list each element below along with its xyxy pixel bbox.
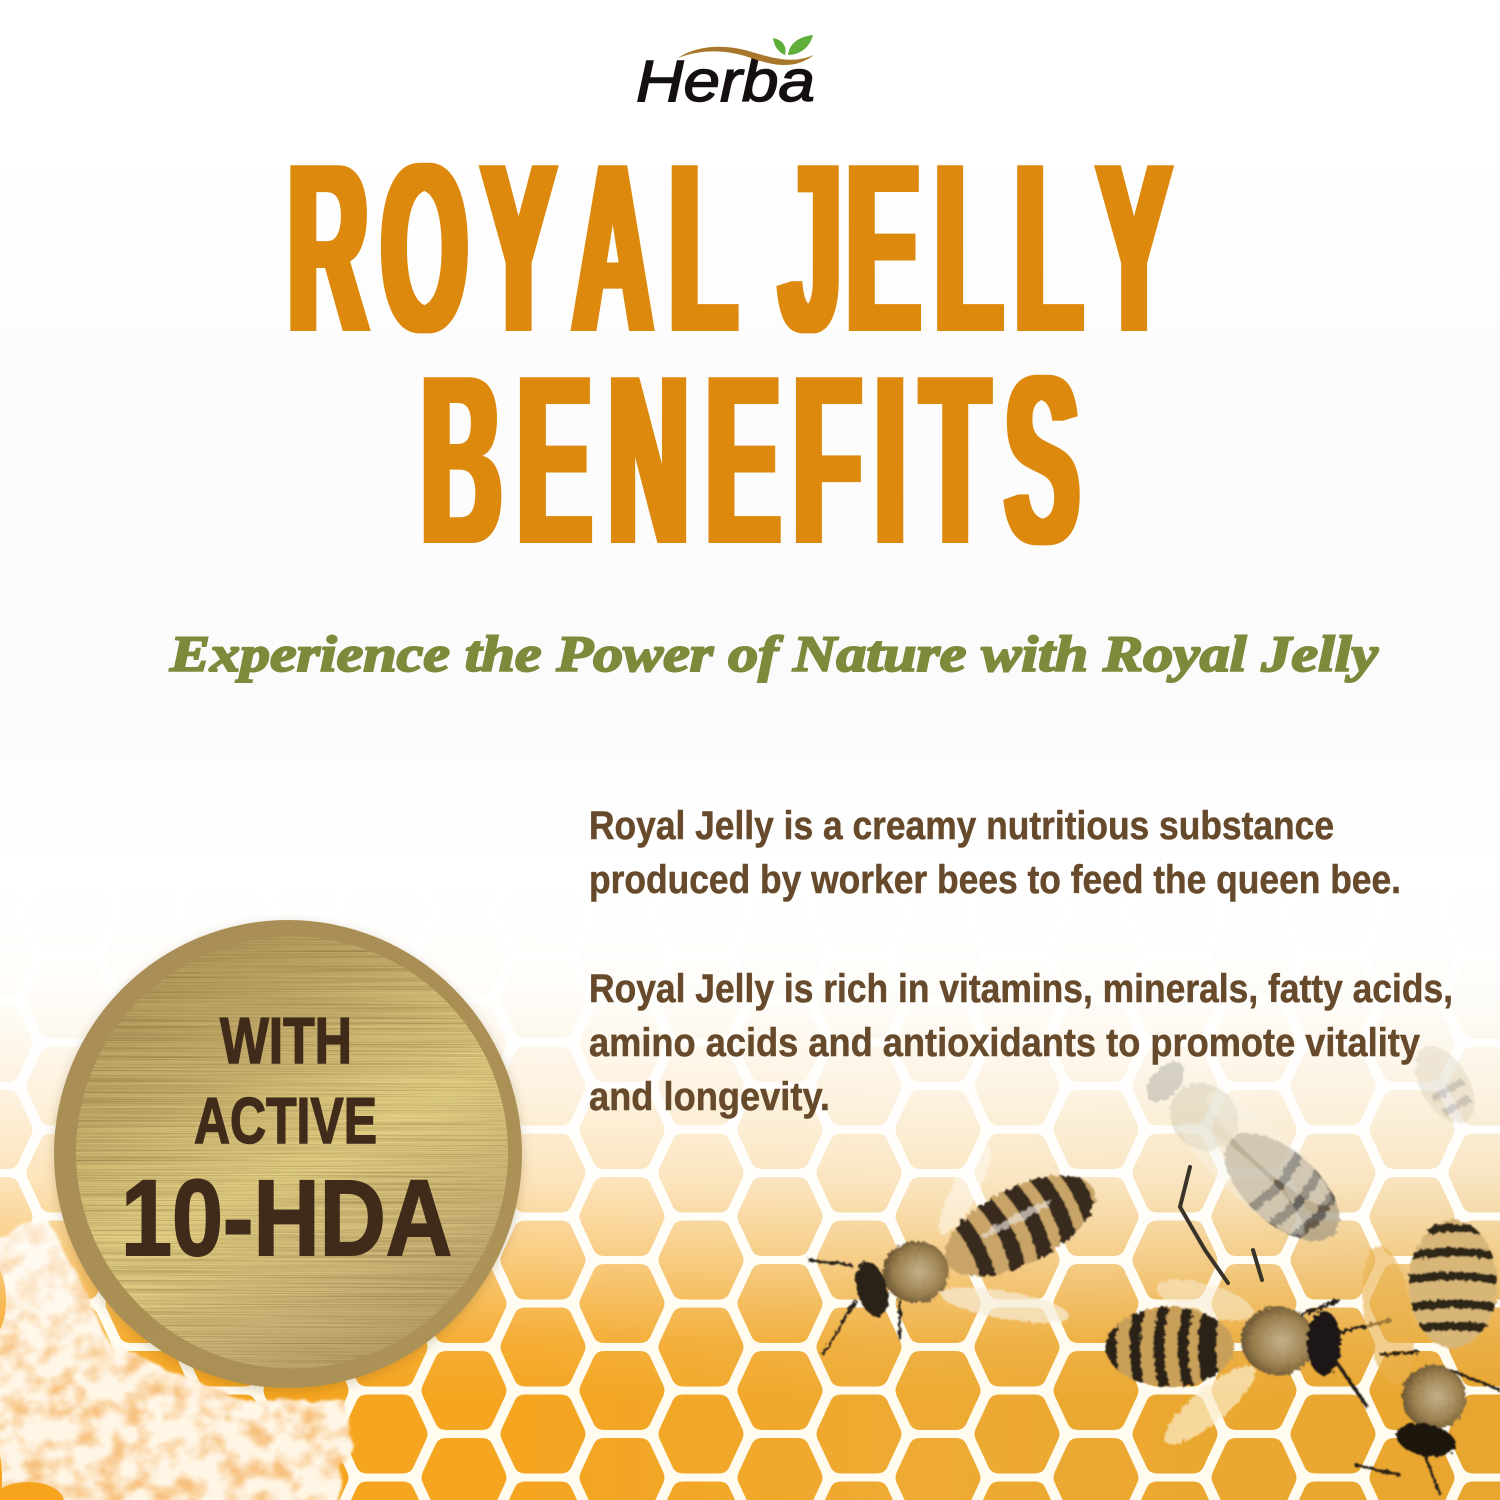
paragraph 2 [589, 967, 1453, 1119]
wax-capped comb patch [0, 1215, 352, 1500]
paragraph 1 [589, 804, 1401, 902]
abdomen [1407, 1220, 1499, 1348]
thorax [1241, 1307, 1315, 1375]
badge text: 10-HDA [121, 1157, 452, 1278]
abdomen [944, 1174, 1098, 1278]
wings [930, 1140, 1000, 1240]
logo wordmark: Herba [636, 49, 815, 114]
head [1307, 1311, 1341, 1375]
thorax [883, 1241, 949, 1303]
logo: Herba [636, 35, 815, 114]
title [288, 113, 1171, 594]
badge ring [54, 920, 522, 1388]
legs [1355, 1352, 1500, 1495]
logo leaves [773, 35, 813, 55]
bee: lower centre [1106, 1272, 1392, 1455]
paragraph 1: produced by worker bees to feed the queen bee. [589, 858, 1401, 902]
thorax [1402, 1365, 1466, 1429]
badge text: WITH [220, 1004, 352, 1077]
gold badge [53, 920, 523, 1392]
head [850, 1258, 894, 1320]
title line 2: BENEFITS [421, 325, 1079, 594]
badge text [121, 1004, 452, 1278]
badge shadow [53, 922, 523, 1392]
abdomen [1106, 1307, 1234, 1387]
ghost bee legs [1180, 1167, 1262, 1283]
antennae and legs [808, 1260, 900, 1355]
wings [1354, 1242, 1422, 1388]
bee: ghost centre [1146, 1060, 1342, 1286]
honey cells beside the wax [0, 1266, 64, 1500]
antennae and legs [1300, 1300, 1392, 1408]
paragraph 2: amino acids and antioxidants to promote vitality [589, 1021, 1421, 1065]
paragraph 2: and longevity. [589, 1075, 830, 1119]
head [1393, 1418, 1459, 1462]
badge text: ACTIVE [194, 1084, 377, 1157]
honeycomb background photo [0, 1004, 1500, 1500]
body text [589, 804, 1453, 1119]
subtitle: Experience the Power of Nature with Royal Jelly [169, 627, 1378, 683]
wings [1153, 1272, 1257, 1328]
bee: left [808, 1140, 1111, 1355]
bee: right [1354, 1220, 1500, 1495]
badge face [76, 936, 508, 1368]
paragraph 1: Royal Jelly is a creamy nutritious substance [589, 804, 1334, 848]
title line 1: ROYAL JELLY [288, 113, 1171, 382]
bee: ghost upper right [1403, 1037, 1487, 1133]
logo swoosh [678, 47, 814, 65]
